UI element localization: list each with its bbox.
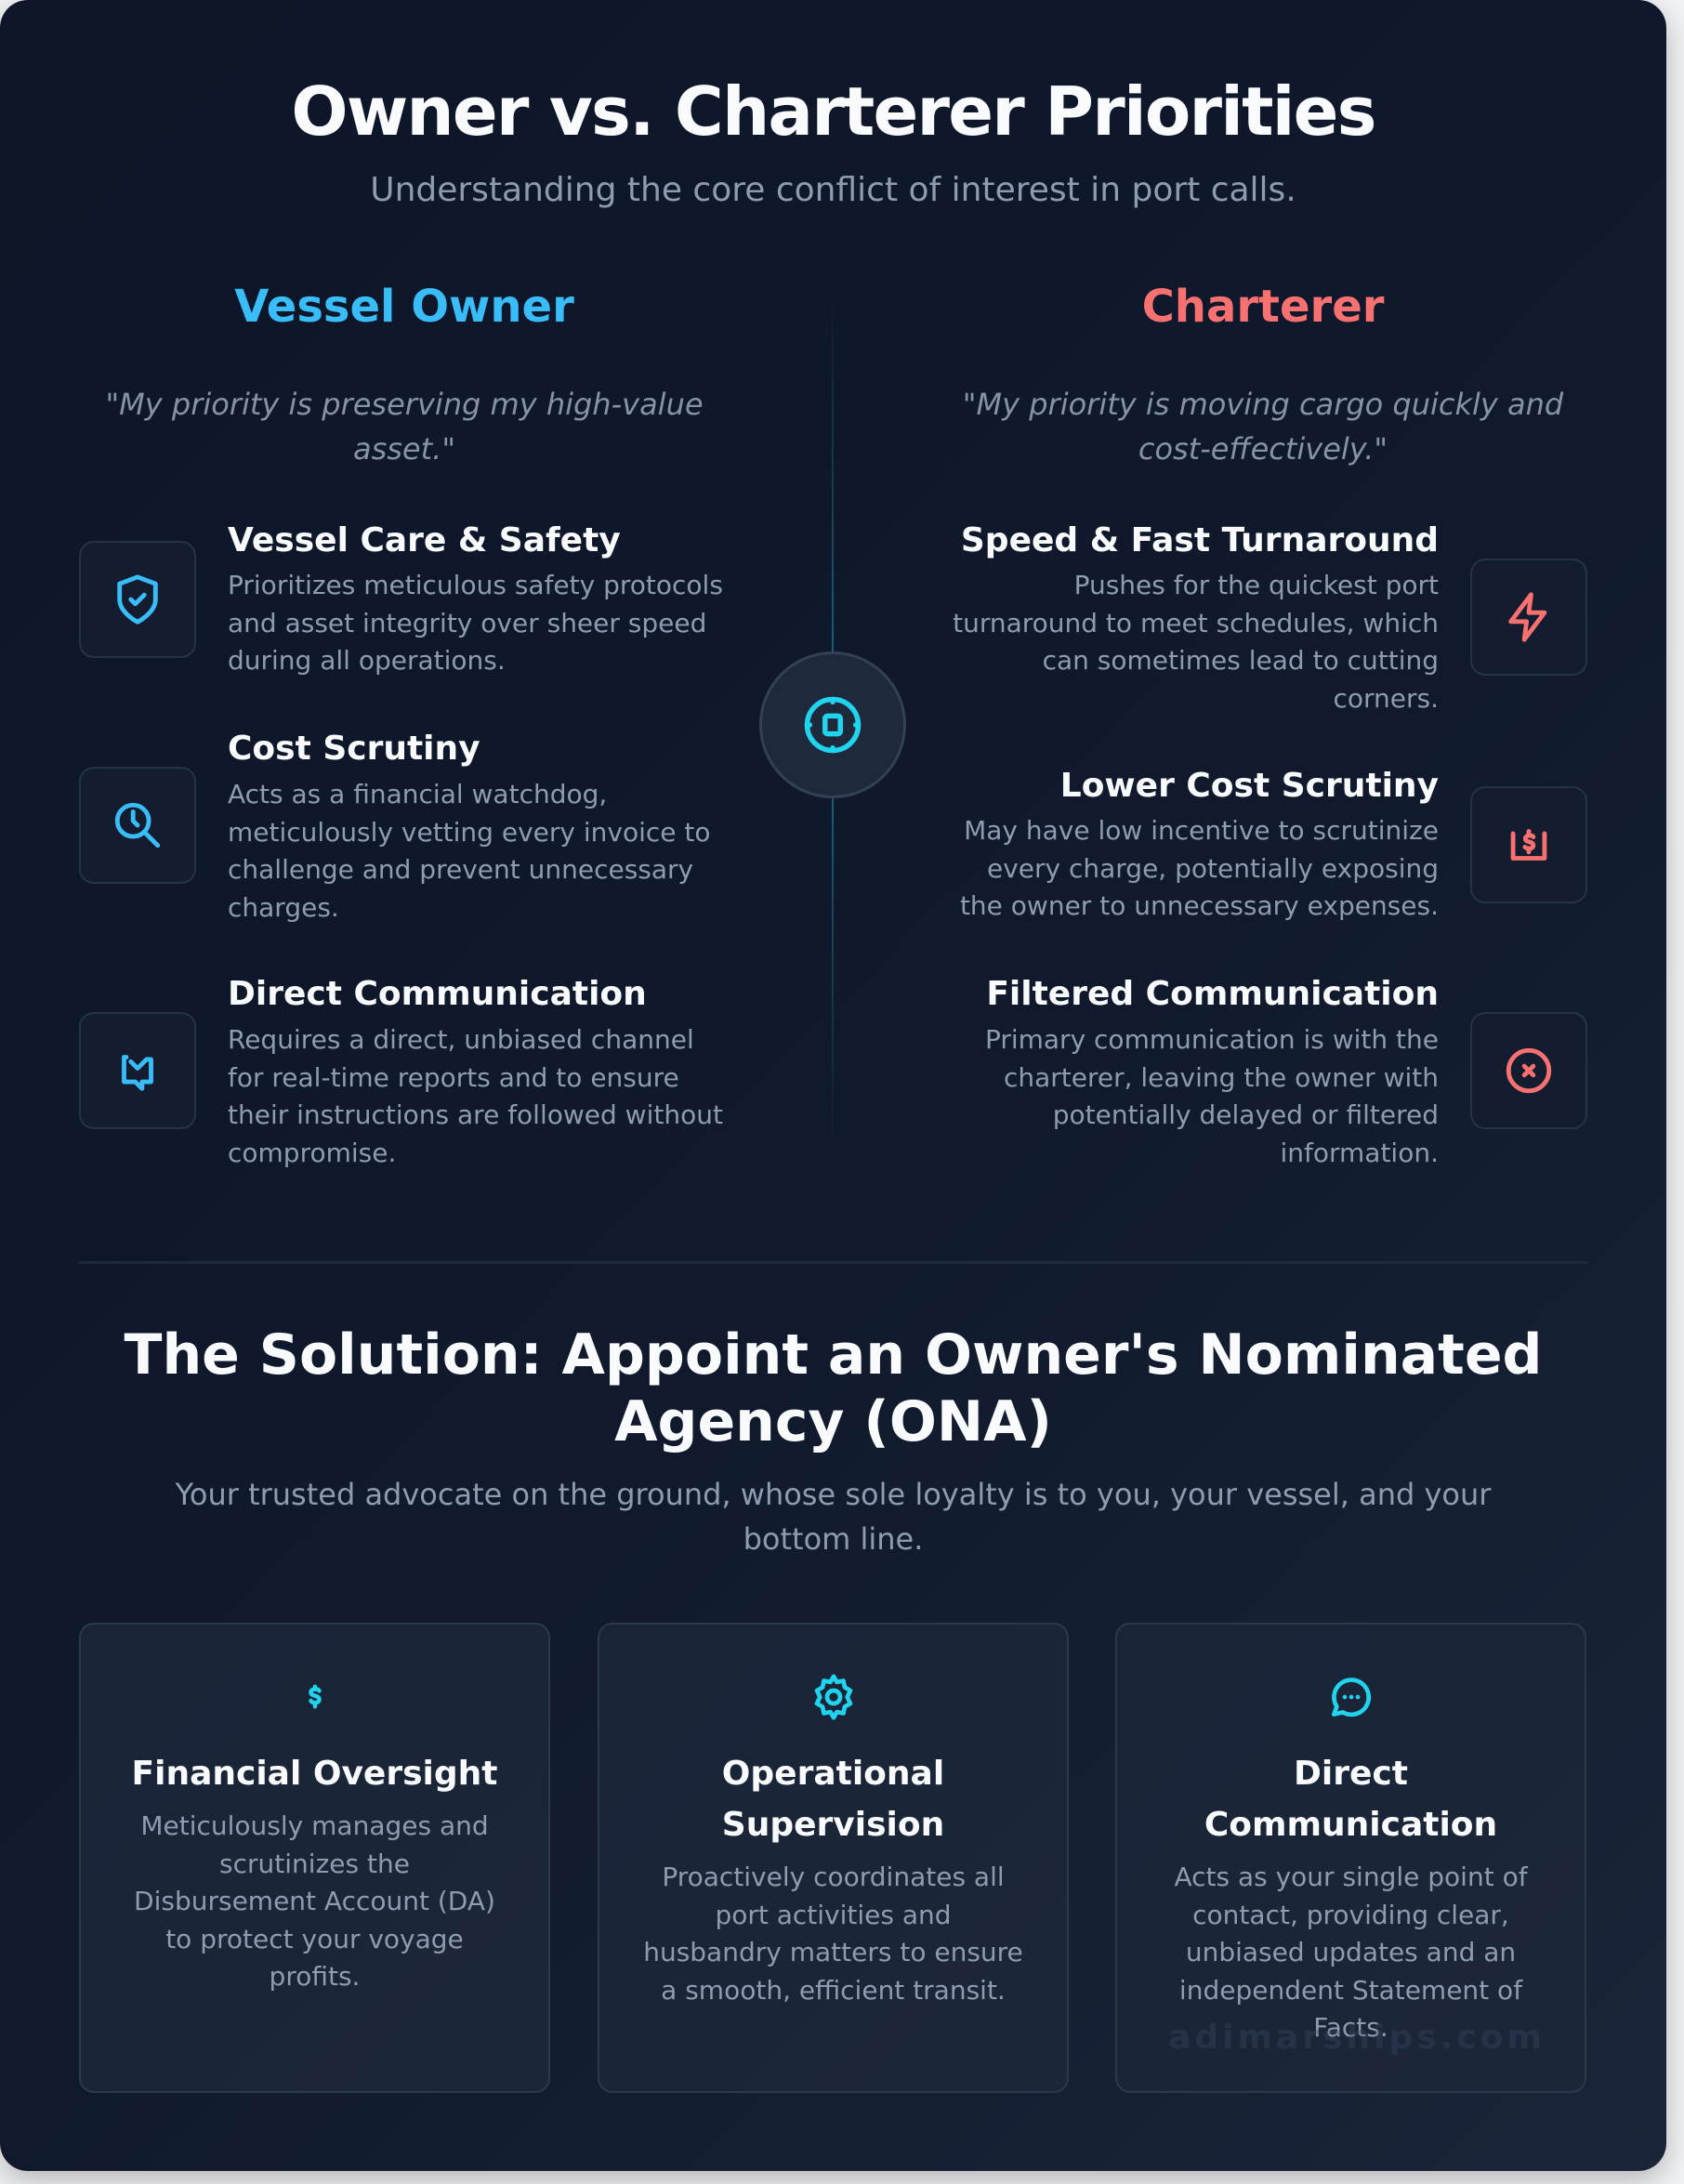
- quote: owner: "My priority is preserving my high-value: [105, 387, 704, 422]
- text: [985, 975, 1439, 1167]
- text: and asset integrity over sheer speed: [228, 608, 706, 638]
- text: turnaround to meet schedules, which: [953, 608, 1439, 638]
- icon: chat: [1332, 1677, 1372, 1717]
- text: [228, 730, 710, 922]
- text: potentially delayed or filtered: [1053, 1099, 1439, 1130]
- owner item: Vessel Care & Safety: [79, 521, 723, 676]
- quote: charterer: [963, 387, 1563, 467]
- title: Owner vs. Charterer Priorities: [291, 72, 1375, 151]
- owner item: Cost Scrutiny: [79, 730, 710, 922]
- desc: to protect your voyage: [165, 1924, 464, 1954]
- title: Communication: [1204, 1806, 1497, 1844]
- text: [953, 521, 1439, 714]
- text: [228, 521, 723, 676]
- text: Requires a direct, unbiased channel: [228, 1024, 694, 1055]
- icon: x circle: [1470, 1012, 1587, 1129]
- text: can sometimes lead to cutting: [1043, 645, 1439, 676]
- desc: scrutinizes the: [219, 1848, 410, 1879]
- title: Direct: [1294, 1755, 1408, 1793]
- solution heading: [125, 1322, 1542, 1454]
- solution subtitle: Your trusted advocate on the ground, whose sole loyalty is to you, your vessel, and your: [176, 1477, 1491, 1512]
- text: challenge and prevent unnecessary: [228, 854, 693, 885]
- text: Primary communication is with the: [985, 1024, 1439, 1055]
- quote: owner: asset.": [353, 431, 455, 467]
- title: [1204, 1755, 1497, 1844]
- desc: husbandry matters to ensure: [643, 1937, 1023, 1967]
- text: corners.: [1333, 682, 1439, 714]
- desc: Facts.: [1313, 2012, 1388, 2043]
- text: every charge, potentially exposing: [987, 853, 1439, 883]
- text: Speed & Fast Turnaround: [961, 521, 1439, 559]
- title: [722, 1755, 944, 1844]
- subtitle: Understanding the core conflict of interest in port calls.: [370, 171, 1296, 209]
- card: Direct Communication: [1115, 1623, 1586, 2093]
- center icon circle: [759, 651, 906, 798]
- text: May have low incentive to scrutinize: [964, 815, 1439, 846]
- desc: Disbursement Account (DA): [134, 1886, 495, 1916]
- solution heading: The Solution: Appoint an Owner's Nominated: [125, 1322, 1542, 1388]
- center divider line: [832, 293, 834, 1157]
- desc: Proactively coordinates all: [662, 1862, 1005, 1892]
- text: Cost Scrutiny: [228, 730, 480, 768]
- column header: Charterer: Charterer: [1142, 281, 1384, 333]
- icon: search: [79, 767, 196, 884]
- text: for real-time reports and to ensure: [228, 1061, 679, 1093]
- text: compromise.: [228, 1138, 396, 1167]
- text: information.: [1280, 1138, 1439, 1167]
- solution heading: Agency (ONA): [614, 1389, 1052, 1454]
- text: the owner to unnecessary expenses.: [960, 890, 1439, 921]
- charterer item: Filtered Communication: [985, 975, 1587, 1167]
- card: Financial Oversight: [79, 1623, 550, 2093]
- text: Acts as a financial watchdog,: [228, 779, 607, 809]
- text: Direct Communication: [228, 975, 647, 1013]
- solution subtitle: bottom line.: [743, 1521, 923, 1557]
- text: meticulously vetting every invoice to: [228, 816, 710, 848]
- desc: port activities and: [715, 1900, 952, 1929]
- text: Vessel Care & Safety: [228, 521, 621, 559]
- icon: message: [79, 1012, 196, 1129]
- desc: contact, providing clear,: [1192, 1900, 1509, 1929]
- title: Operational: [722, 1755, 944, 1793]
- text: their instructions are followed without: [228, 1099, 723, 1130]
- desc: [1174, 1862, 1528, 2043]
- icon: cost bucket: [1470, 786, 1587, 903]
- desc: [643, 1862, 1023, 2006]
- title: Financial Oversight: [132, 1755, 497, 1793]
- text: charterer, leaving the owner with: [1004, 1061, 1439, 1093]
- desc: unbiased updates and an: [1186, 1937, 1516, 1967]
- text: Pushes for the quickest port: [1074, 570, 1439, 600]
- text: [228, 975, 723, 1167]
- quote: charterer: "My priority is moving cargo quickly and: [963, 387, 1563, 422]
- charterer item: Lower Cost Scrutiny: [960, 767, 1587, 921]
- icon: gear: [814, 1675, 853, 1719]
- solution subtitle: [175, 1477, 1491, 1557]
- text: Filtered Communication: [986, 975, 1439, 1013]
- title: Supervision: [722, 1806, 944, 1844]
- owner item: Direct Communication: [79, 975, 723, 1167]
- icon: lightning: [1470, 559, 1587, 676]
- desc: Meticulously manages and: [140, 1810, 489, 1841]
- desc: a smooth, efficient transit.: [661, 1974, 1006, 2006]
- quote: owner: [105, 387, 704, 467]
- watermark: adimarships.com: [1168, 2019, 1546, 2057]
- icon: dollar: [309, 1684, 322, 1708]
- desc: Acts as your single point of: [1174, 1862, 1528, 1892]
- text: Prioritizes meticulous safety protocols: [228, 570, 723, 600]
- text: Lower Cost Scrutiny: [1060, 767, 1439, 805]
- desc: independent Statement of: [1179, 1974, 1522, 2006]
- card: Operational Supervision: [598, 1623, 1069, 2093]
- text: [960, 767, 1439, 921]
- quote: charterer: cost-effectively.": [1138, 431, 1388, 467]
- column header: Vessel Owner: Vessel Owner: [234, 281, 574, 333]
- desc: profits.: [270, 1961, 360, 1992]
- charterer item: Speed & Fast Turnaround: [953, 521, 1587, 714]
- desc: [134, 1810, 495, 1992]
- text: charges.: [228, 892, 339, 922]
- text: during all operations.: [228, 645, 506, 676]
- icon: shield: [79, 541, 196, 658]
